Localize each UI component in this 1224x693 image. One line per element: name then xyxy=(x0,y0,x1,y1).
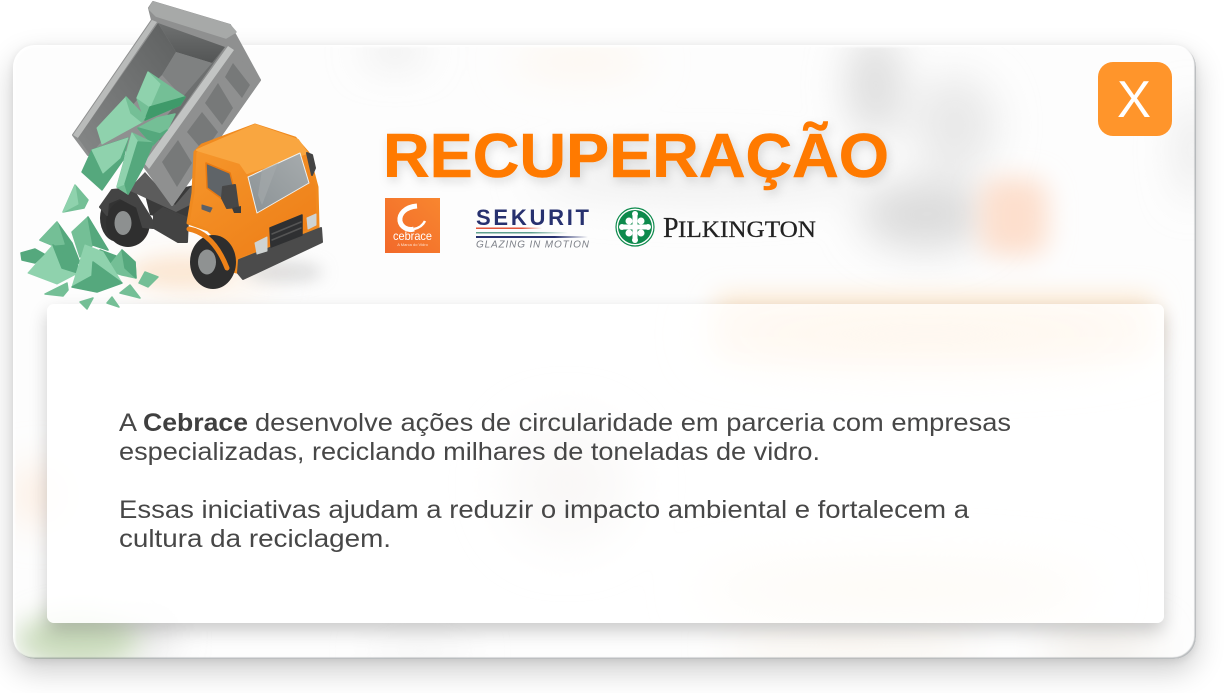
front wheel xyxy=(189,229,236,289)
logo: pilkington: P xyxy=(663,213,679,244)
logo: sekurit xyxy=(476,205,590,250)
cab xyxy=(188,125,322,279)
illustration: dump truck with glass xyxy=(20,1,323,310)
body text: Cebrace xyxy=(143,409,248,437)
panel blur tints xyxy=(828,338,1026,357)
logo: cebrace: cebrace xyxy=(393,229,432,243)
back wall xyxy=(158,23,225,63)
logo: sekurit: SEKURIT xyxy=(476,205,590,230)
rear wheels and chassis xyxy=(100,185,195,247)
close button: X xyxy=(1117,71,1151,129)
side face xyxy=(144,46,260,205)
content panel xyxy=(47,304,1164,623)
glass in bed xyxy=(82,72,185,194)
bed silhouette xyxy=(73,2,260,205)
floor xyxy=(162,52,212,100)
logo: cebrace: A Marca do Vidro xyxy=(397,242,429,247)
logo: pilkington: ILKINGTON xyxy=(678,217,816,242)
logo: cebrace xyxy=(385,198,440,253)
title: RECUPERAÇÃO xyxy=(383,122,889,191)
glass pile xyxy=(21,185,158,309)
bed underside xyxy=(128,172,194,212)
body text: cultura da reciclagem. xyxy=(119,525,391,553)
close button xyxy=(1098,62,1172,136)
logo: sekurit: GLAZING IN MOTION xyxy=(476,240,590,250)
body text: A xyxy=(119,409,137,437)
body text: especializadas, reciclando milhares de toneladas de vidro. xyxy=(119,438,820,466)
body text: Essas iniciativas ajudam a reduzir o impacto ambiental e fortalecem a xyxy=(119,496,969,524)
dump bed xyxy=(73,2,260,212)
left inner wall xyxy=(78,23,176,155)
ground shadow xyxy=(130,258,323,286)
logo: pilkington xyxy=(615,207,816,247)
body text: desenvolve ações de circularidade em parceria com empresas xyxy=(255,409,1011,437)
